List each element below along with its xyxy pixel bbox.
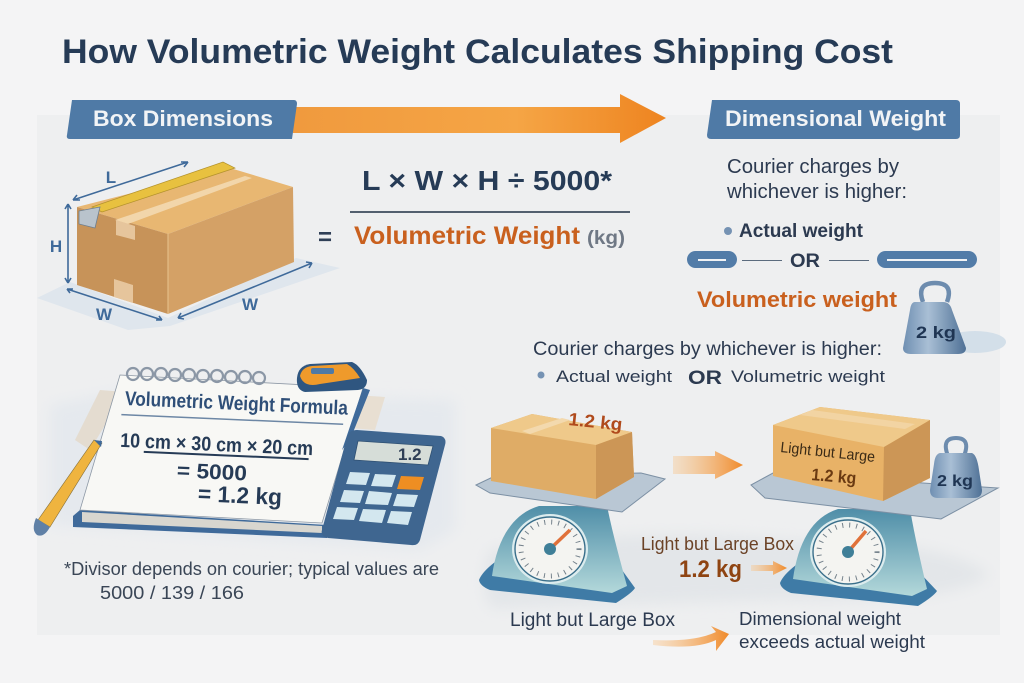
caption: dimensional weight exceeds — [739, 609, 925, 652]
icon: 2 kg weight — [903, 283, 1006, 354]
box illustration: W — [96, 305, 113, 324]
notebook text — [118, 388, 349, 513]
formula: Volumetric Weight — [354, 222, 581, 250]
icon: 2 kg weight: 2 kg — [916, 323, 956, 342]
small arrow — [751, 561, 787, 575]
background panel — [37, 115, 1000, 635]
right scale: 1.2 kg — [811, 465, 857, 488]
comparison heading: Courier charges by whichever is higher: — [533, 339, 882, 360]
soft floor shadow — [484, 534, 990, 608]
small weight — [946, 438, 966, 456]
box label: Light but Large — [780, 439, 876, 466]
notebook text: Volumetric Weight Formula — [125, 388, 349, 420]
header: box dimensions — [67, 100, 297, 139]
notebook text: = 1.2 kg — [197, 480, 282, 510]
box illustration: W — [242, 295, 259, 314]
tape measure — [92, 162, 235, 212]
notebook spiral — [127, 368, 265, 384]
title: How Volumetric Weight Calculates Shipping Cost — [62, 33, 893, 71]
box illustration: L — [106, 168, 116, 187]
dimension arrows — [65, 162, 312, 320]
footnote — [64, 559, 439, 603]
caption: dimensional weight exceeds: Dimensional weight — [739, 609, 901, 629]
courier text block: whichever is higher: — [726, 181, 907, 203]
comparison heading: OR — [688, 368, 722, 389]
formula: (kg) — [587, 228, 625, 249]
header: box dimensions: Box Dimensions — [93, 106, 273, 131]
calculator: 1.2 — [398, 445, 422, 464]
notebook — [73, 368, 385, 538]
notebook text: = 5000 — [176, 459, 247, 485]
right scale — [751, 407, 998, 606]
OR divider: OR — [790, 251, 820, 272]
formula — [350, 165, 630, 250]
calculator — [322, 430, 446, 545]
bottom arrow — [653, 626, 729, 651]
header: dimensional weight — [707, 100, 960, 139]
caption: dimensional weight exceeds: exceeds actual weight — [739, 632, 925, 652]
callout: light but large box: 1.2 kg — [679, 556, 742, 583]
equals sign: = — [318, 224, 332, 251]
volumetric weight label: Volumetric weight — [697, 287, 898, 312]
callout: light but large box: Light but Large Box — [641, 534, 794, 554]
flow arrow — [293, 94, 666, 143]
comparison heading: Actual weight — [556, 367, 672, 386]
callout: light but large box — [641, 534, 794, 583]
desk shadow behind notebook — [50, 392, 455, 550]
courier text block: Courier charges by — [727, 156, 899, 178]
footnote: 5000 / 139 / 166 — [100, 583, 244, 603]
notebook text: 10 cm × 30 cm × 20 cm — [120, 430, 314, 460]
left scale — [476, 409, 665, 603]
OR divider — [687, 251, 977, 272]
header: dimensional weight: Dimensional Weight — [725, 106, 947, 131]
weight label: 1.2 kg — [568, 409, 623, 435]
formula: L × W × H ÷ 5000* — [362, 165, 612, 196]
box illustration: H — [50, 237, 62, 256]
middle arrow — [673, 451, 743, 479]
courier text block — [724, 156, 907, 242]
box illustration — [37, 162, 340, 330]
comparison heading: Volumetric weight — [731, 367, 885, 386]
caption: light but large box: Light but Large Box — [510, 610, 675, 631]
comparison heading — [533, 339, 885, 389]
courier text block: Actual weight — [739, 221, 864, 242]
footnote: *Divisor depends on courier; typical values are — [64, 559, 439, 579]
clip — [297, 362, 367, 392]
right scale: 2 kg — [937, 473, 973, 490]
pencil — [34, 440, 102, 536]
